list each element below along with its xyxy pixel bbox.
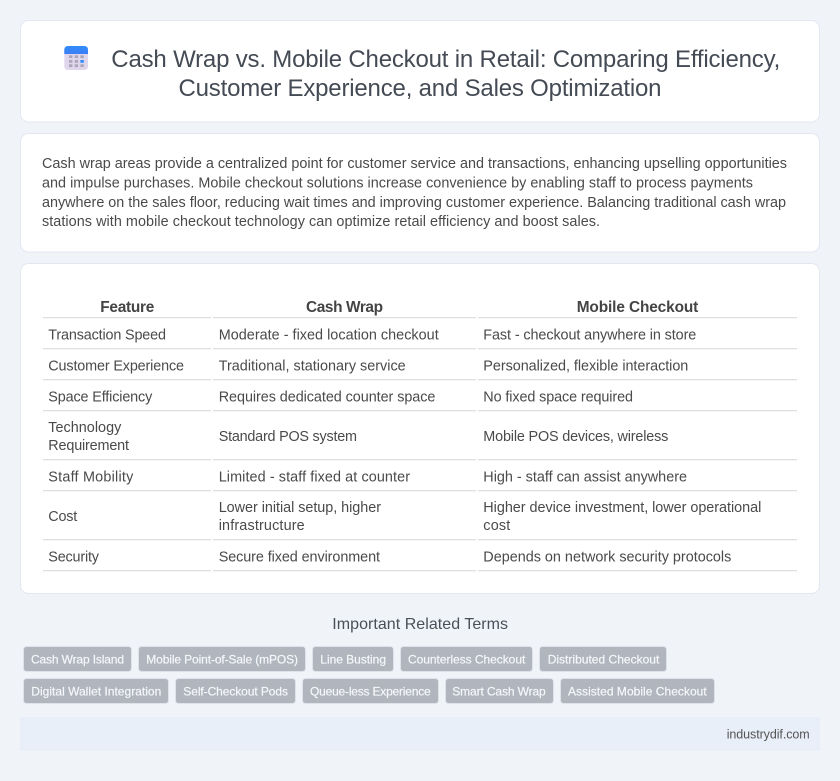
chip: self-checkout pods <box>176 678 296 704</box>
chip: cash wrap island <box>24 646 132 672</box>
row: transaction speed <box>48 327 696 343</box>
row: transaction speed: Transaction Speed <box>48 327 166 343</box>
footer bar <box>20 717 820 751</box>
table header <box>100 299 698 316</box>
intro paragraph: stations with mobile checkout technology can optimize retail efficiency and boost sales. <box>42 214 600 230</box>
chip: queue-less experience: Queue-less Experience <box>310 684 431 698</box>
row: space efficiency: No fixed space required <box>483 389 633 405</box>
row: staff mobility: High - staff can assist anywhere <box>483 469 687 485</box>
row: customer experience: Traditional, stationary service <box>219 358 406 374</box>
row: staff mobility: Staff Mobility <box>48 469 134 485</box>
row: transaction speed: Fast - checkout anywhere in store <box>483 327 696 343</box>
row: technology requirement: Requirement <box>48 438 129 454</box>
chip: counterless checkout <box>400 646 532 672</box>
panel: title card <box>20 20 820 122</box>
table header: Mobile Checkout <box>577 299 698 316</box>
panel: introduction text <box>20 134 820 252</box>
chip: line busting <box>312 646 394 672</box>
row: space efficiency <box>48 389 633 405</box>
intro paragraph: Cash wrap areas provide a centralized point for customer service and transactions, enhancing upselling opportunities <box>42 156 787 172</box>
chip: digital wallet integration: Digital Wallet Integration <box>31 684 161 698</box>
chip: self-checkout pods: Self-Checkout Pods <box>183 684 288 698</box>
chip: smart cash wrap <box>446 678 554 704</box>
row: customer experience: Customer Experience <box>48 358 184 374</box>
chip: counterless checkout: Counterless Checkout <box>408 652 526 666</box>
chip: digital wallet integration <box>24 678 168 704</box>
row: cost <box>48 500 761 534</box>
intro paragraph <box>42 156 787 230</box>
row: transaction speed: Moderate - fixed location checkout <box>219 327 439 343</box>
row: technology requirement: Mobile POS devices, wireless <box>483 429 668 445</box>
row: technology requirement: Standard POS system <box>219 429 357 445</box>
row: cost: Cost <box>48 509 77 525</box>
chip: mobile point-of-sale: Mobile Point-of-Sale (mPOS) <box>146 652 298 666</box>
intro paragraph: anywhere on the sales floor, reducing wait times and improving customer experience. Balancing traditional cash wrap <box>42 195 786 211</box>
panel: comparison table <box>20 264 820 594</box>
table header: Cash Wrap <box>306 299 383 316</box>
related term chips <box>24 646 714 704</box>
row: cost: infrastructure <box>219 518 305 534</box>
row: cost: Lower initial setup, higher <box>219 500 381 516</box>
chip: assisted mobile checkout <box>560 678 714 704</box>
title: Cash Wrap vs. Mobile Checkout in Retail: Comparing Efficiency, <box>111 46 780 73</box>
footer source: industrydif.com <box>727 727 810 741</box>
row: technology requirement: Technology <box>48 420 122 436</box>
chip: mobile point-of-sale <box>138 646 306 672</box>
row: space efficiency: Space Efficiency <box>48 389 153 405</box>
row: staff mobility: Limited - staff fixed at counter <box>219 469 410 485</box>
title <box>111 46 780 102</box>
row: security: Secure fixed environment <box>219 549 380 565</box>
row: technology requirement <box>48 420 668 454</box>
title: Customer Experience, and Sales Optimization <box>178 75 662 102</box>
row: staff mobility <box>48 469 687 485</box>
row: security: Security <box>48 549 100 565</box>
table header: Feature <box>100 299 155 316</box>
heading: important related terms: Important Related Terms <box>332 616 508 633</box>
intro paragraph: and impulse purchases. Mobile checkout solutions increase convenience by enabling staff to process payments <box>42 176 753 192</box>
chip: assisted mobile checkout: Assisted Mobile Checkout <box>568 684 707 698</box>
chip: smart cash wrap: Smart Cash Wrap <box>452 684 546 698</box>
chip: distributed checkout: Distributed Checkout <box>548 652 660 666</box>
icon: calendar <box>64 46 88 70</box>
row: customer experience: Personalized, flexible interaction <box>483 358 688 374</box>
chip: cash wrap island: Cash Wrap Island <box>31 652 124 666</box>
chip: distributed checkout <box>540 646 666 672</box>
row: cost: Higher device investment, lower operational <box>483 500 761 516</box>
row: security <box>48 549 731 565</box>
chip: line busting: Line Busting <box>320 652 386 666</box>
row: cost: cost <box>483 518 510 534</box>
row: customer experience <box>48 358 688 374</box>
chip: queue-less experience <box>302 678 438 704</box>
row: security: Depends on network security protocols <box>483 549 731 565</box>
row: space efficiency: Requires dedicated counter space <box>219 389 435 405</box>
